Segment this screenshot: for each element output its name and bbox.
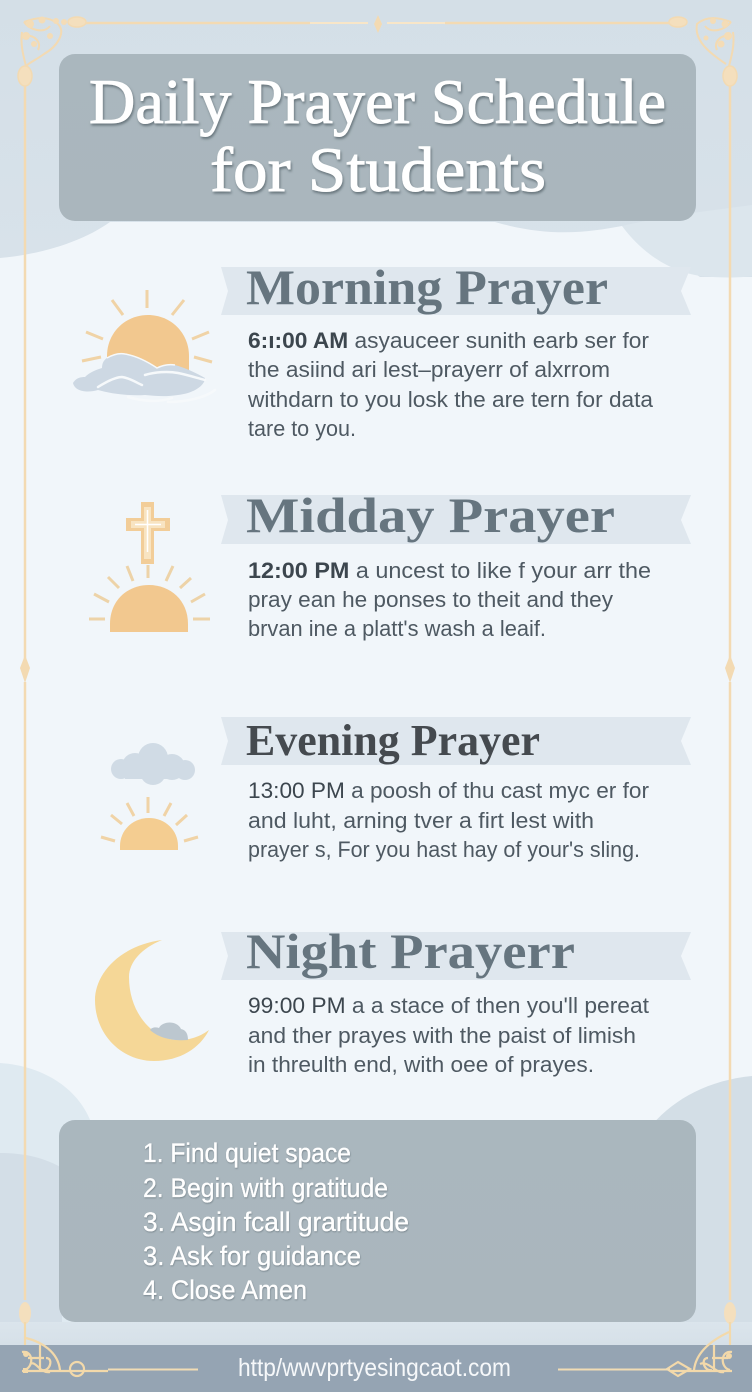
midday text bbox=[248, 558, 651, 641]
footer url: http/wwvprtyesingcaot.com bbox=[238, 1354, 511, 1382]
morning text: 6:ı:00 AM asyauceer sunith earb ser for bbox=[248, 328, 649, 353]
morning banner bbox=[221, 267, 691, 315]
steps list: 3. Ask for guidance bbox=[143, 1241, 361, 1271]
icon: cloud above sun bbox=[101, 743, 198, 850]
title bbox=[89, 66, 666, 205]
panel: evening prayer bbox=[221, 716, 691, 862]
evening text: 13:00 PM a poosh of thu cast myc er for bbox=[248, 778, 649, 803]
panel: morning prayer bbox=[221, 259, 691, 441]
title panel bbox=[59, 54, 696, 221]
morning heading: Morning Prayer bbox=[246, 259, 608, 315]
midday text: pray ean he ponses to theit and they bbox=[248, 587, 613, 612]
panel: prayer steps bbox=[59, 1120, 696, 1322]
midday text: brvan ine a platt's wash a leaif. bbox=[248, 616, 546, 641]
evening banner bbox=[221, 717, 691, 765]
midday text: 12:00 PM a uncest to like f your arr the bbox=[248, 558, 651, 583]
top-left corner ornament bbox=[18, 16, 86, 86]
morning text: tare to you. bbox=[248, 416, 356, 441]
night text: and ther prayes with the paist of limish bbox=[248, 1023, 636, 1048]
steps list: 3. Asgin fcall grartitude bbox=[143, 1207, 409, 1237]
night text: in threulth end, with oee of prayes. bbox=[248, 1052, 594, 1077]
icon: sun with clouds bbox=[73, 290, 215, 402]
panel: night prayer bbox=[221, 923, 691, 1077]
title: Daily Prayer Schedule bbox=[89, 66, 666, 137]
icon: crescent moon with cloud bbox=[95, 940, 209, 1061]
midday banner bbox=[221, 495, 691, 544]
title: for Students bbox=[210, 134, 546, 205]
morning text: the asiind ari lest–prayerr of alxrrom bbox=[248, 357, 610, 382]
evening text bbox=[248, 778, 649, 862]
night heading: Night Prayerr bbox=[246, 923, 575, 979]
midday heading: Midday Prayer bbox=[246, 487, 615, 543]
icon: cross above sun bbox=[89, 502, 210, 632]
footer band bbox=[0, 1345, 752, 1392]
evening text: prayer s, For you hast hay of your's sling. bbox=[248, 837, 640, 862]
night text: 99:00 PM a a stace of then you'll pereat bbox=[248, 993, 649, 1018]
steps list: 2. Begin with gratitude bbox=[143, 1173, 388, 1203]
morning text bbox=[247, 328, 654, 441]
night text bbox=[248, 993, 649, 1077]
bottom-right corner ornament bbox=[558, 1302, 736, 1376]
steps list: 1. Find quiet space bbox=[143, 1138, 351, 1168]
night banner bbox=[221, 932, 691, 980]
evening text: and luht, arning tver a firt lest with bbox=[248, 808, 594, 833]
panel: midday prayer bbox=[221, 487, 691, 641]
bottom-left corner ornament bbox=[19, 1302, 198, 1376]
top-right corner ornament bbox=[669, 17, 737, 86]
morning text: withdarn to you losk the are tern for data bbox=[247, 387, 654, 412]
steps list bbox=[143, 1138, 409, 1305]
evening heading: Evening Prayer bbox=[246, 716, 540, 765]
steps list: 4. Close Amen bbox=[143, 1275, 307, 1305]
